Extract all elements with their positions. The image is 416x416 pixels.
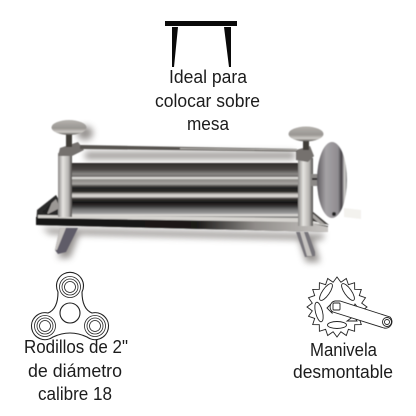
posts bbox=[58, 142, 314, 226]
text: rodillos bbox=[24, 336, 128, 404]
top rod bbox=[80, 145, 297, 152]
text: rodillos: de diámetro bbox=[28, 360, 122, 381]
text: manivela desmontable: Manivela bbox=[310, 339, 378, 360]
text: manivela desmontable bbox=[293, 339, 393, 382]
handwheel bbox=[311, 142, 361, 219]
tray bbox=[36, 195, 329, 232]
machine shadow bbox=[42, 126, 325, 262]
photo: stainless steel rolling machine bbox=[36, 120, 361, 262]
text: ideal para colocar sobre mesa: Ideal para bbox=[169, 66, 248, 87]
icon: fidget spinner rollers bbox=[31, 272, 109, 340]
text: ideal para colocar sobre mesa bbox=[155, 66, 260, 134]
text: rodillos: calibre 18 bbox=[38, 383, 112, 404]
icon: table bbox=[165, 21, 237, 67]
text: rodillos: Rodillos de 2" bbox=[24, 336, 128, 357]
rollers bbox=[72, 163, 300, 218]
text: ideal para colocar sobre mesa: mesa bbox=[187, 113, 230, 134]
text: manivela desmontable: desmontable bbox=[293, 361, 393, 382]
feet bbox=[55, 228, 315, 257]
text: ideal para colocar sobre mesa: colocar sobre bbox=[155, 90, 260, 111]
knobs bbox=[52, 120, 324, 150]
icon: crank and chainring bbox=[307, 277, 392, 337]
